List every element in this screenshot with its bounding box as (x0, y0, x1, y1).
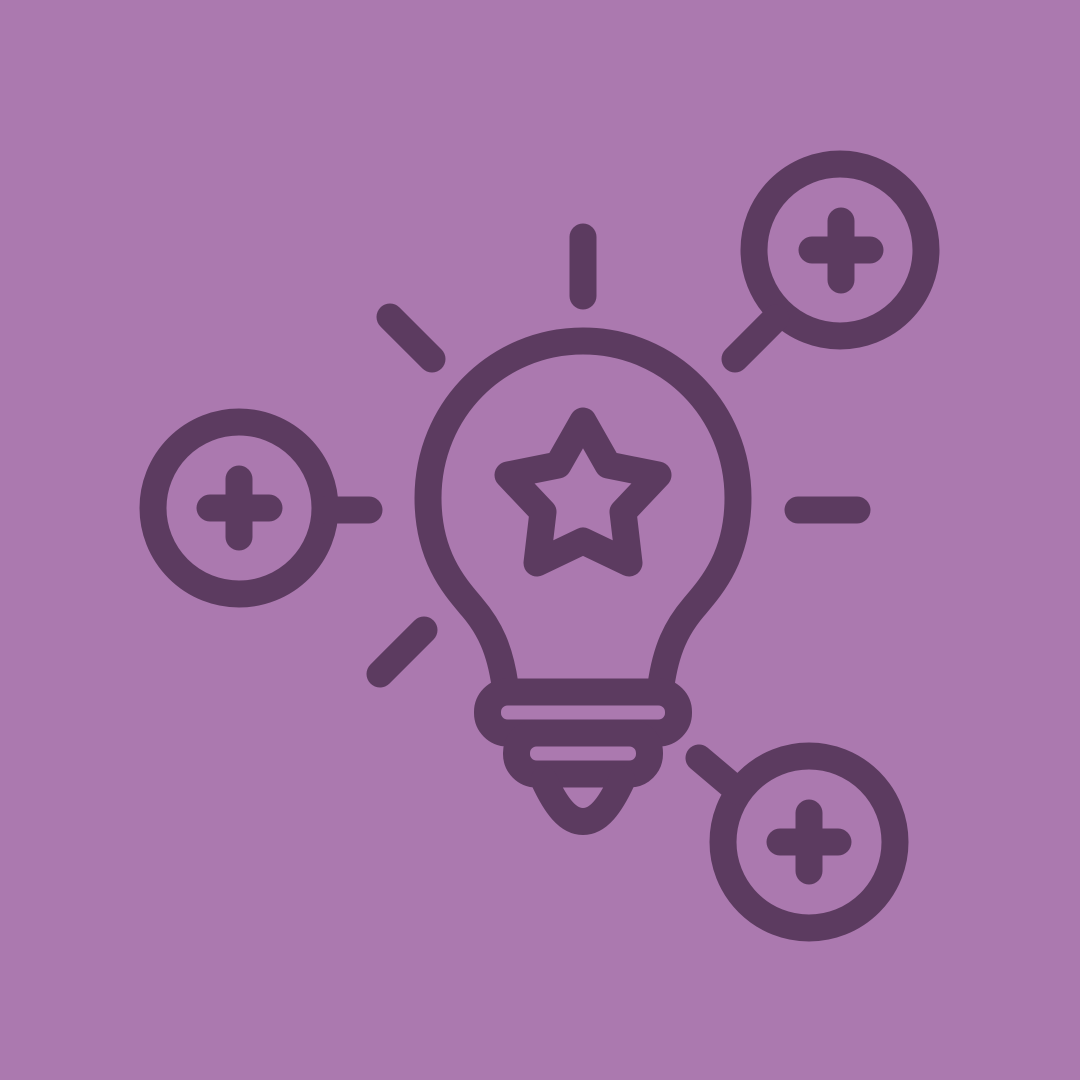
ray: top (570, 237, 596, 296)
icon: star inside bulb (508, 421, 658, 563)
ray: right (798, 496, 857, 524)
magnifier: upper right (735, 164, 926, 359)
magnifier: lower right (699, 756, 895, 928)
icon: bulb glass outline (428, 341, 738, 685)
magnifier: left (153, 422, 369, 594)
ray: lower left (380, 630, 424, 674)
icon: bulb upper base (488, 692, 678, 733)
icon: bulb tip (544, 780, 622, 822)
ray: upper left (390, 317, 432, 359)
icon: bulb lower base (516, 733, 650, 774)
